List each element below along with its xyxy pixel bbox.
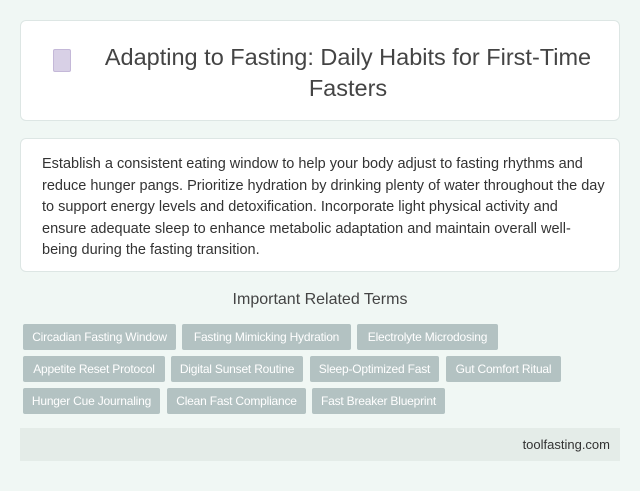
tags: Appetite Reset Protocol xyxy=(33,362,155,376)
footer xyxy=(20,428,620,461)
title card xyxy=(20,20,620,121)
description text: reduce hunger pangs. Prioritize hydration by drinking plenty of water throughout the day xyxy=(42,178,605,194)
description text: Establish a consistent eating window to help your body adjust to fasting rhythms and xyxy=(42,156,583,172)
tags: Sleep-Optimized Fast xyxy=(319,362,430,376)
tags: Fasting Mimicking Hydration xyxy=(194,330,339,344)
description text: being during the fasting transition. xyxy=(42,242,260,258)
heading: related terms: Important Related Terms xyxy=(233,291,407,308)
tags: Fast Breaker Blueprint xyxy=(321,394,436,408)
description card xyxy=(20,138,620,272)
tags: Hunger Cue Journaling xyxy=(32,394,151,408)
description text: to support energy levels and detoxification. Incorporate light physical activity and xyxy=(42,199,558,215)
title: Adapting to Fasting: Daily Habits for First-Time Fasters xyxy=(105,44,591,101)
tags: Gut Comfort Ritual xyxy=(456,362,551,376)
tags: Electrolyte Microdosing xyxy=(368,330,487,344)
footer source: toolfasting.com xyxy=(523,437,610,452)
tags: Circadian Fasting Window xyxy=(32,330,167,344)
tags: Digital Sunset Routine xyxy=(180,362,294,376)
tags: Clean Fast Compliance xyxy=(176,394,297,408)
description text: ensure adequate sleep to enhance metabolic adaptation and maintain overall well- xyxy=(42,220,571,236)
icon: document scroll xyxy=(53,49,71,72)
description text xyxy=(42,156,605,258)
